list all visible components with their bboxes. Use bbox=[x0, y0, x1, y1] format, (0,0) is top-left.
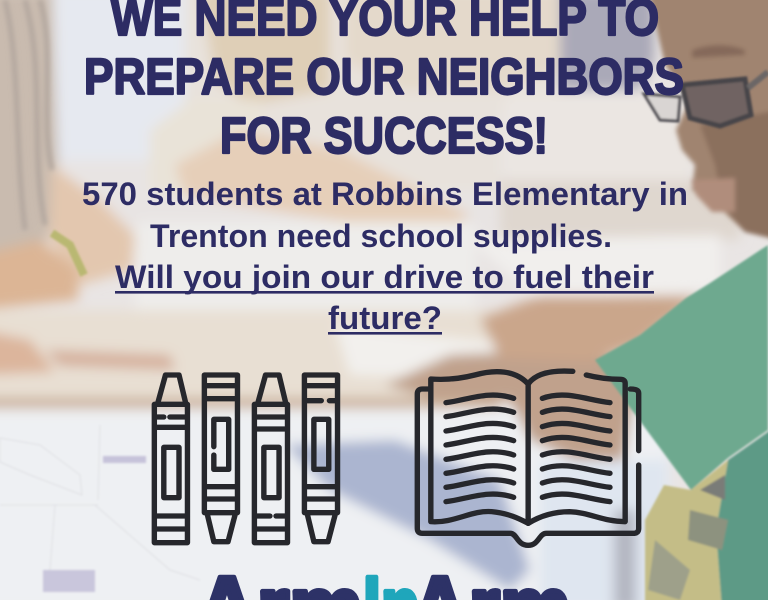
glasses bbox=[682, 79, 751, 126]
title bbox=[84, 0, 684, 164]
message text: 570 students at Robbins Elementary in bbox=[82, 176, 688, 212]
logo: ArmInArm bbox=[197, 558, 571, 600]
message text: Will you join our drive to fuel their bbox=[115, 259, 654, 295]
title: PREPARE OUR NEIGHBORS bbox=[84, 48, 684, 105]
bracelet bbox=[52, 233, 84, 275]
message text: Trenton need school supplies. bbox=[150, 218, 612, 254]
message text bbox=[82, 176, 688, 336]
icon: crayons bbox=[154, 375, 338, 543]
icon: open book bbox=[417, 371, 639, 545]
green sleeve and shirt bbox=[595, 245, 768, 490]
message text: future? bbox=[328, 300, 442, 336]
title: FOR SUCCESS! bbox=[220, 107, 548, 164]
